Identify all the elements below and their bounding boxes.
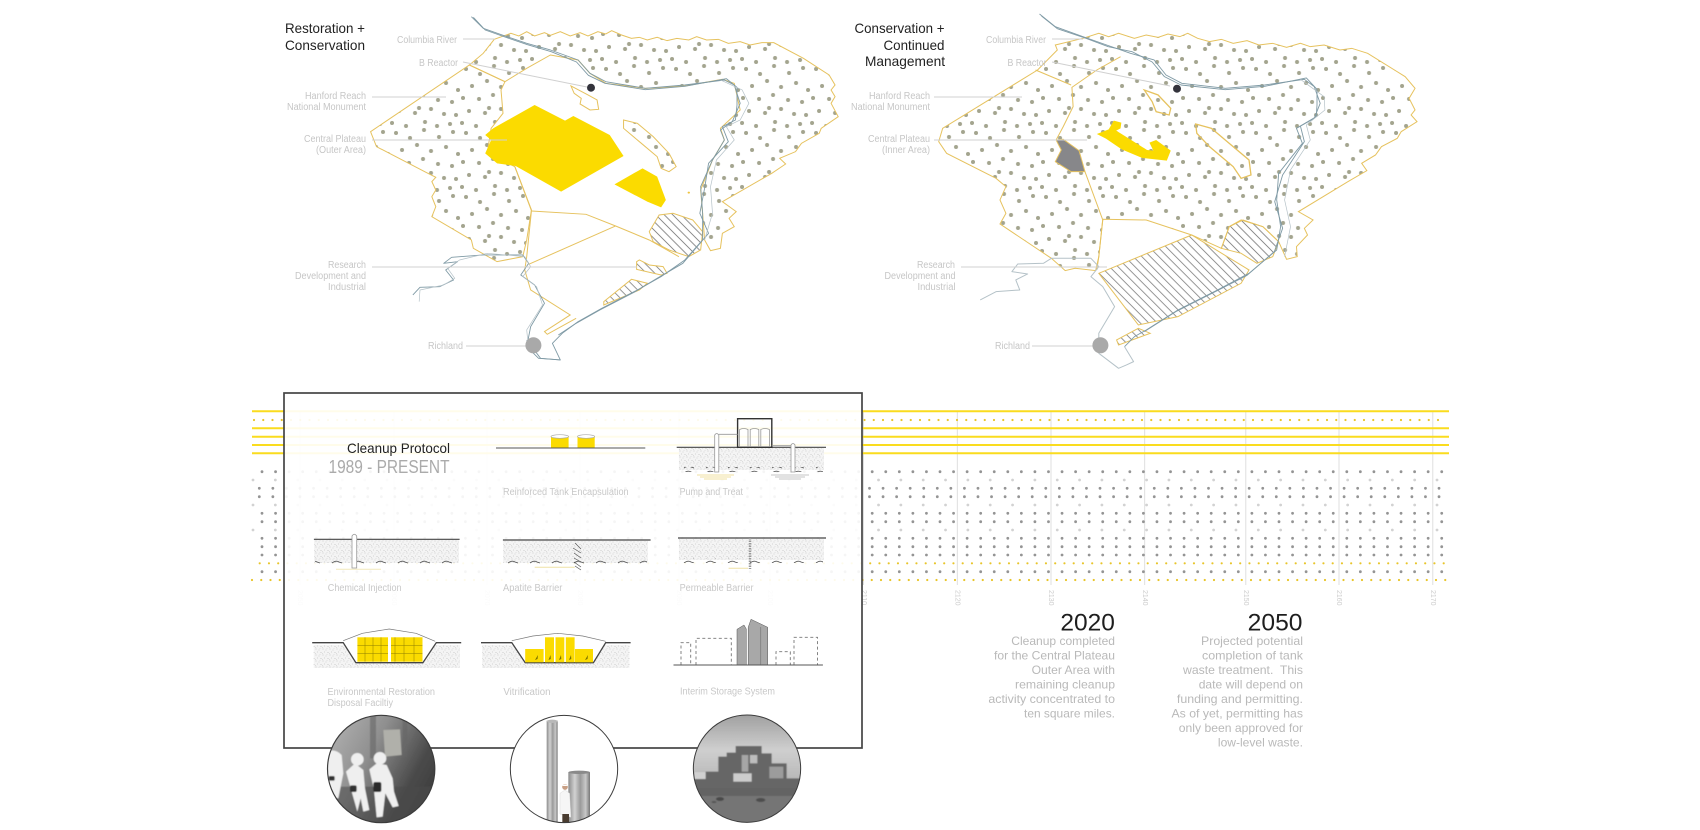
map 1 labels: Hanford Reach xyxy=(305,91,366,102)
diagram: permeable barrier: Permeable Barrier xyxy=(680,583,754,594)
2050 description: low-level waste. xyxy=(1218,736,1303,750)
callout: 2050: 2050 xyxy=(1248,610,1302,636)
year axis labels: 2140 xyxy=(1141,590,1148,606)
map 1 labels: Research xyxy=(328,260,366,271)
title: restoration + conservation: Conservation xyxy=(285,37,365,53)
columbia river xyxy=(1040,14,1325,347)
leader lines xyxy=(372,39,637,346)
diagram: pump and treat xyxy=(677,419,826,498)
title: restoration + conservation: Restoration + xyxy=(285,20,365,36)
diagram: permeable barrier xyxy=(678,538,826,594)
hatched research and development zone xyxy=(1099,235,1249,325)
map 1 labels: National Monument xyxy=(287,102,366,113)
2020 description: ten square miles. xyxy=(1024,706,1115,720)
central plateau south lobe xyxy=(614,168,666,207)
map: restoration + conservation xyxy=(285,17,838,360)
internal boundaries xyxy=(1036,70,1071,85)
panel: cleanup protocol xyxy=(284,393,862,748)
diagram: apatite barrier xyxy=(503,540,651,594)
map 1 labels: Columbia River xyxy=(397,35,458,46)
columbia river xyxy=(471,17,749,360)
richland marker xyxy=(525,337,541,353)
central plateau outer area xyxy=(485,105,624,192)
2050 description: waste treatment. This xyxy=(1182,663,1303,677)
photo: steel canisters with technician xyxy=(510,715,618,824)
diagram: environmental restoration disposal facility: Environmental Restoration xyxy=(328,687,435,698)
panel frame xyxy=(284,393,862,748)
year axis labels: 2070 xyxy=(483,590,490,606)
year axis labels: 2090 xyxy=(675,590,682,606)
2050 description: completion of tank xyxy=(1202,648,1304,662)
photo: b reactor building xyxy=(692,714,802,823)
map 2 labels: Hanford Reach xyxy=(869,91,930,102)
2050 description: date will depend on xyxy=(1199,678,1303,692)
map 1 labels: Central Plateau xyxy=(304,134,366,145)
2020 description xyxy=(988,634,1115,720)
central plateau grey zone xyxy=(1055,139,1085,172)
conservation dot field north and east xyxy=(469,31,838,251)
hatched research zone xyxy=(649,213,703,257)
map 2 labels: Research xyxy=(917,260,955,271)
map 1 labels: Development and xyxy=(295,271,366,282)
conservation dot field xyxy=(939,33,1417,271)
diagram: interim storage system xyxy=(674,619,823,698)
yellow dotted rows xyxy=(252,420,1449,580)
map 2 labels: Columbia River xyxy=(986,35,1047,46)
timeline chart xyxy=(252,411,1449,606)
grey dotted rows xyxy=(259,472,1447,572)
internal boundaries xyxy=(515,167,576,334)
diagram: environmental restoration disposal facility: Disposal Faciltiy xyxy=(328,698,393,709)
map 2 drawing xyxy=(939,14,1417,368)
year axis labels xyxy=(296,590,1436,606)
map 1 drawing xyxy=(371,17,838,360)
map 2 labels: Development and xyxy=(884,271,956,282)
callout: 2020: 2020 xyxy=(1060,610,1115,636)
diagram: environmental restoration disposal facility xyxy=(312,629,461,709)
year axis labels: 2060 xyxy=(390,590,397,606)
diagram: reinforced tank encapsulation xyxy=(496,435,645,498)
map 2 labels: Richland xyxy=(995,341,1030,352)
map 2 labels: (Inner Area) xyxy=(882,145,930,156)
map 1 labels: (Outer Area) xyxy=(316,145,366,156)
diagram: interim storage system: Interim Storage System xyxy=(680,686,775,698)
panel heading xyxy=(328,440,450,477)
year axis labels: 2150 xyxy=(1242,590,1249,606)
title: conservation + continued management: Conservation + xyxy=(854,20,944,36)
island B Reactor xyxy=(571,86,599,110)
map 1 labels xyxy=(287,35,463,352)
island east xyxy=(624,120,676,172)
diagram: vitrification xyxy=(481,633,631,698)
yakima river xyxy=(413,255,560,360)
year axis labels: 2130 xyxy=(1047,590,1054,606)
2050 description: As of yet, permitting has xyxy=(1172,706,1303,720)
year axis labels: 2120 xyxy=(954,590,960,606)
title: conservation + continued management: Management xyxy=(865,53,945,69)
yakima river xyxy=(980,258,1134,368)
callout: 2050 xyxy=(1172,610,1304,750)
2050 description: Projected potential xyxy=(1201,634,1303,648)
callout: 2020 xyxy=(988,610,1115,720)
2020 description: for the Central Plateau xyxy=(994,648,1115,662)
2050 description xyxy=(1172,634,1304,750)
year axis labels: 2170 xyxy=(1429,590,1436,606)
year axis labels: 2050 xyxy=(296,590,303,606)
diagram: pump and treat: Pump and Treat xyxy=(680,487,743,498)
2050 description: funding and permitting. xyxy=(1177,692,1303,706)
light dotted rows xyxy=(253,480,1447,530)
yellow solid rows xyxy=(252,411,1449,453)
map 1 labels: Richland xyxy=(428,341,463,352)
panel heading: 1989 - PRESENT xyxy=(328,457,450,477)
diagram: vitrification: Vitrification xyxy=(503,687,550,698)
conservation dot field west xyxy=(371,65,531,262)
diagram: reinforced tank encapsulation: Reinforced Tank Encapsulation xyxy=(503,487,629,498)
richland marker xyxy=(1092,337,1108,353)
title: conservation + continued management: Continued xyxy=(884,37,944,53)
year axis labels: 2110 xyxy=(860,590,867,605)
2020 description: remaining cleanup xyxy=(1015,678,1115,692)
map 2 labels: Industrial xyxy=(918,282,956,293)
island lines xyxy=(1144,90,1171,115)
title: conservation + continued management xyxy=(854,20,945,69)
map 2 labels: National Monument xyxy=(851,102,930,113)
2020 description: Cleanup completed xyxy=(1011,634,1115,648)
b reactor marker xyxy=(587,84,595,92)
year axis labels: 2160 xyxy=(1335,590,1342,606)
b reactor marker xyxy=(1173,85,1181,93)
diagram: chemical injection: Chemical Injection xyxy=(328,583,402,594)
map 1 labels: Industrial xyxy=(328,282,366,293)
map 2 labels: B Reactor xyxy=(1008,58,1047,69)
title: restoration + conservation xyxy=(285,20,365,53)
2050 description: only been approved for xyxy=(1179,721,1303,735)
panel heading: Cleanup Protocol xyxy=(347,440,450,456)
photo: workers in protective suits xyxy=(326,714,436,824)
diagram: chemical injection xyxy=(314,534,460,594)
year axis labels: 2080 xyxy=(576,590,583,606)
map: conservation + continued management xyxy=(851,14,1417,368)
year axis labels: 2100 xyxy=(766,590,773,606)
diagram: apatite barrier: Apatite Barrier xyxy=(503,583,563,594)
central plateau inner area yellow xyxy=(1097,121,1171,161)
decade tick lines xyxy=(300,411,1433,585)
leader lines xyxy=(934,39,1170,346)
2020 description: Outer Area with xyxy=(1032,663,1115,677)
map 2 labels xyxy=(851,35,1047,352)
map 2 labels: Central Plateau xyxy=(868,134,930,145)
2020 description: activity concentrated to xyxy=(988,692,1115,706)
map 1 labels: B Reactor xyxy=(419,58,459,69)
